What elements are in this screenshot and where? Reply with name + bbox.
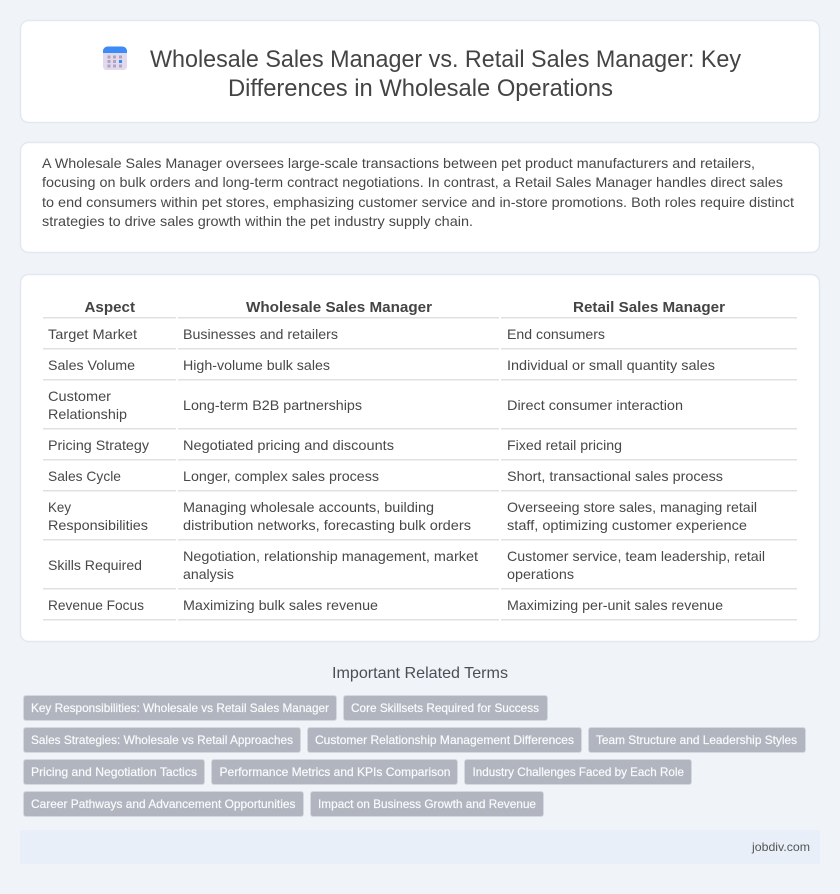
icon: calendar (103, 46, 127, 70)
row: revenue focus: Maximizing bulk sales revenue (183, 597, 378, 613)
row: sales cycle: Sales Cycle (48, 468, 121, 484)
row: customer relationship: Customer (48, 388, 111, 404)
table header row: Wholesale Sales Manager (246, 299, 432, 316)
panel: comparison table (20, 274, 820, 642)
table header row (84, 299, 725, 316)
row: customer relationship: Direct consumer interaction (507, 397, 683, 413)
tag: Key Responsibilities: Wholesale vs Retail Sales Manager (31, 701, 329, 715)
intro paragraph: to end consumers within pet stores, emphasizing customer service and in-store promotions. Both roles require distinct (42, 194, 794, 210)
row: pricing strategy (48, 437, 622, 453)
row: skills required: operations (507, 566, 574, 582)
title: Wholesale Sales Manager vs. Retail Sales Manager: Key (150, 46, 741, 73)
row: sales volume: High-volume bulk sales (183, 357, 330, 373)
tag (308, 728, 582, 752)
footer (20, 830, 820, 864)
row: pricing strategy: Pricing Strategy (48, 437, 149, 453)
row: skills required: Skills Required (48, 557, 142, 573)
row: skills required: analysis (183, 566, 234, 582)
row: sales volume (48, 357, 715, 373)
intro paragraph: A Wholesale Sales Manager oversees large-scale transactions between pet product manufacturers and retailers, (42, 155, 755, 171)
tag: Team Structure and Leadership Styles (596, 733, 797, 747)
panel: intro text (20, 142, 820, 252)
row: pricing strategy: Fixed retail pricing (507, 437, 622, 453)
row: sales cycle (48, 468, 723, 484)
tag (344, 696, 548, 720)
row: skills required: Negotiation, relationship management, market (183, 548, 478, 564)
row: key responsibilities: Responsibilities (48, 517, 148, 533)
intro paragraph: focusing on bulk orders and long-term contract negotiations. In contrast, a Retail Sales Manager handles direct sales (42, 174, 783, 190)
tag: Performance Metrics and KPIs Comparison (220, 765, 450, 779)
tag: Sales Strategies: Wholesale vs Retail Approaches (31, 733, 293, 747)
tag (24, 792, 304, 816)
tag: Impact on Business Growth and Revenue (318, 797, 536, 811)
tag: Industry Challenges Faced by Each Role (472, 765, 684, 779)
tag (310, 792, 544, 816)
table header row: Retail Sales Manager (573, 299, 725, 316)
row: key responsibilities: Managing wholesale accounts, building (183, 499, 434, 515)
footer: jobdiv.com (751, 840, 810, 854)
row: pricing strategy: Negotiated pricing and discounts (183, 437, 394, 453)
row: key responsibilities: Overseeing store sales, managing retail (507, 499, 757, 515)
row: sales cycle: Short, transactional sales process (507, 468, 723, 484)
heading: important related terms: Important Related Terms (332, 665, 508, 682)
tag: Core Skillsets Required for Success (351, 701, 539, 715)
row: key responsibilities: Key (48, 499, 71, 515)
row: target market (48, 326, 605, 342)
row: sales volume: Individual or small quantity sales (507, 357, 715, 373)
row: skills required (48, 548, 765, 582)
row: revenue focus (48, 597, 723, 613)
table header row: Aspect (84, 299, 135, 316)
tag (464, 760, 692, 784)
tag: Customer Relationship Management Differences (315, 733, 574, 747)
title: Differences in Wholesale Operations (228, 75, 613, 102)
tag (24, 760, 204, 784)
row: revenue focus: Revenue Focus (48, 597, 144, 613)
row: skills required: Customer service, team leadership, retail (507, 548, 765, 564)
row: target market: Businesses and retailers (183, 326, 338, 342)
row: sales volume: Sales Volume (48, 357, 135, 373)
intro paragraph (42, 155, 794, 229)
row: target market: Target Market (48, 326, 137, 342)
tag group: related terms (24, 696, 806, 816)
row: customer relationship: Long-term B2B partnerships (183, 397, 362, 413)
tag (212, 760, 458, 784)
tag (24, 696, 336, 720)
row: revenue focus: Maximizing per-unit sales revenue (507, 597, 723, 613)
panel: title header (20, 20, 820, 122)
tag: Career Pathways and Advancement Opportunities (31, 797, 296, 811)
tag (588, 728, 806, 752)
intro paragraph: strategies to drive sales growth within the pet industry supply chain. (42, 213, 473, 229)
tag (24, 728, 300, 752)
row: key responsibilities: distribution networks, forecasting bulk orders (183, 517, 471, 533)
row: key responsibilities (48, 499, 757, 533)
row: customer relationship: Relationship (48, 406, 127, 422)
row: sales cycle: Longer, complex sales process (183, 468, 379, 484)
row: target market: End consumers (507, 326, 605, 342)
title (150, 46, 741, 102)
row: customer relationship (48, 388, 683, 422)
row: key responsibilities: staff, optimizing customer experience (507, 517, 747, 533)
tag: Pricing and Negotiation Tactics (31, 765, 197, 779)
